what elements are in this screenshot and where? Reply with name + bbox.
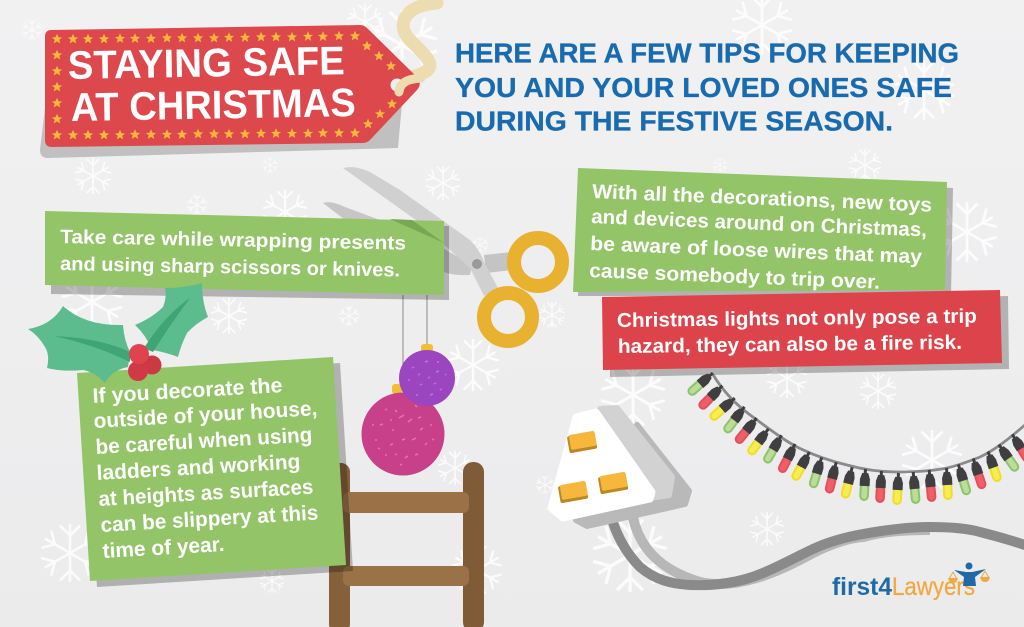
tip panel: ladders bbox=[77, 357, 353, 587]
leaf bbox=[135, 283, 208, 357]
plug and cable bbox=[551, 408, 1024, 585]
fold bbox=[390, 219, 444, 243]
tip text: outside of your house, bbox=[93, 397, 318, 433]
tip text bbox=[589, 181, 932, 294]
tip text: Take care while wrapping presents bbox=[60, 226, 406, 255]
tip text: can be slippery at this bbox=[100, 501, 319, 537]
tip text: ladders and working bbox=[96, 450, 301, 485]
tip text: be careful when using bbox=[95, 424, 313, 459]
logo bbox=[832, 562, 990, 601]
logo figure bbox=[948, 562, 990, 586]
purple bauble bbox=[399, 344, 455, 406]
tip text: time of year. bbox=[102, 533, 225, 563]
tip panel: loose wires bbox=[573, 168, 953, 296]
plug face bbox=[551, 412, 652, 518]
heading: DURING THE FESTIVE SEASON. bbox=[455, 106, 893, 136]
tip text: and using sharp scissors or knives. bbox=[60, 253, 400, 282]
tip text: at heights as surfaces bbox=[98, 476, 314, 511]
tip text: be aware of loose wires that may bbox=[590, 233, 923, 268]
tip text: With all the decorations, new toys bbox=[592, 181, 932, 217]
heading: HERE ARE A FEW TIPS FOR KEEPING bbox=[455, 38, 959, 68]
title text: AT CHRISTMAS bbox=[70, 81, 356, 130]
ladder bbox=[329, 462, 484, 627]
title text bbox=[67, 39, 356, 130]
star border bbox=[52, 31, 397, 139]
logo: Lawyers bbox=[892, 573, 975, 601]
heading bbox=[455, 38, 959, 136]
pink bauble bbox=[362, 384, 444, 476]
handle ring bbox=[484, 293, 532, 341]
berries bbox=[128, 344, 162, 381]
title tag bbox=[40, 3, 437, 158]
cable shadow bbox=[633, 518, 930, 584]
tip panel: wrapping presents bbox=[45, 211, 449, 300]
pivot bbox=[472, 259, 482, 269]
scissors bbox=[323, 167, 562, 341]
title text: STAYING SAFE bbox=[67, 39, 345, 88]
holly bbox=[28, 283, 208, 383]
tip text: hazard, they can also be a fire risk. bbox=[618, 332, 962, 358]
pin bbox=[558, 481, 588, 503]
logo: first4 bbox=[832, 573, 892, 601]
tip text: cause somebody to trip over. bbox=[589, 260, 880, 294]
tip text bbox=[60, 226, 406, 282]
tip text bbox=[92, 374, 319, 563]
string of lights bbox=[686, 369, 1024, 504]
ribbon bbox=[399, 3, 437, 89]
tip text: and devices around on Christmas, bbox=[591, 206, 927, 241]
leaf bbox=[28, 306, 130, 383]
plug back bbox=[576, 425, 689, 526]
tip text: Christmas lights not only pose a trip bbox=[617, 306, 977, 332]
tip text bbox=[617, 306, 977, 358]
handle ring bbox=[514, 238, 562, 286]
pin bbox=[567, 431, 597, 453]
heading: YOU AND YOUR LOVED ONES SAFE bbox=[455, 72, 952, 103]
pin bbox=[598, 472, 628, 494]
tip text: If you decorate the bbox=[92, 374, 283, 408]
tip panel: fire risk bbox=[602, 290, 1009, 377]
cable bbox=[610, 513, 1024, 585]
bauble strings bbox=[403, 295, 427, 392]
